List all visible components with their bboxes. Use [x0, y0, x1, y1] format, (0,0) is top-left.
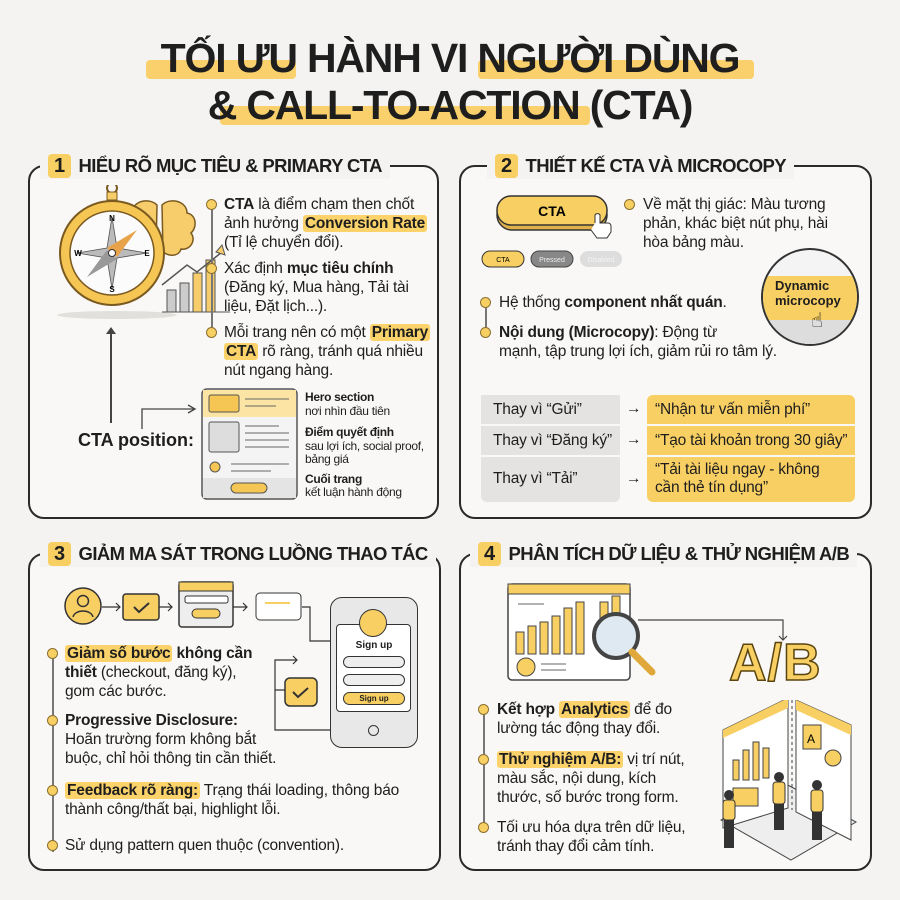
table: microcopy examples [481, 395, 855, 502]
bullets 1: Xác định mục tiêu chính [224, 260, 393, 277]
icon: dynamic microcopy: Dynamic [775, 278, 829, 293]
icon: dynamic microcopy: ☝ [811, 310, 823, 332]
bullets 1: nút ngang hàng. [224, 362, 333, 379]
bullets 3: thành công/thất bại, highlight lỗi. [65, 801, 280, 818]
position labels [305, 390, 424, 499]
icon: dynamic microcopy: microcopy [775, 293, 841, 308]
table: microcopy examples: “Tạo tài khoản trong 30 giây” [655, 432, 847, 449]
bullets 1: liệu, Đặt lịch...). [224, 298, 327, 315]
title highlights [146, 60, 754, 125]
bullets 3: gom các bước. [65, 683, 167, 700]
title: TỐI ƯU HÀNH VI NGƯỜI DÙNG [161, 35, 739, 81]
heading 2 [487, 153, 794, 179]
heading 2: THIẾT KẾ CTA VÀ MICROCOPY [526, 155, 786, 176]
bullets 3: Feedback rõ ràng: Trạng thái loading, thông báo [67, 782, 399, 799]
bullets 4: lường tác động thay đổi. [497, 720, 660, 737]
bullets 3 [47, 645, 399, 854]
table: microcopy examples: → [626, 470, 641, 487]
label: CTA position: CTA position: [78, 430, 194, 450]
bullets 1: ảnh hưởng Conversion Rate [224, 215, 425, 232]
bullets 1: CTA là điểm chạm then chốt [224, 196, 414, 213]
icon: dynamic microcopy [761, 248, 859, 346]
table: microcopy examples: → [626, 431, 641, 448]
heading 2: 2 [501, 155, 512, 177]
table: microcopy examples: cần thẻ tín dụng” [655, 479, 768, 496]
position labels: bảng giá Cuối trang [305, 452, 362, 486]
A/B label: A/B [729, 634, 822, 692]
bullets 1 [206, 196, 430, 379]
panel: 4 [459, 553, 872, 871]
icon: compass brain chart: E [144, 249, 150, 258]
bullets: component & microcopy: Hệ thống component nhất quán. [499, 294, 727, 311]
phone sign up: Sign up [356, 640, 392, 651]
icon: analytics dashboard [507, 583, 788, 681]
panel: 3 [28, 553, 441, 871]
heading 3: 3 [54, 543, 65, 565]
table: microcopy examples: Thay vì “Đăng ký” [493, 432, 612, 449]
heading 1: HIỂU RÕ MỤC TIÊU & PRIMARY CTA [79, 155, 382, 176]
table: microcopy examples: Thay vì “Gửi” [493, 401, 582, 418]
bullets 3: Sử dụng pattern quen thuộc (convention). [65, 837, 344, 854]
bullet: visual [624, 196, 828, 251]
heading 4: PHÂN TÍCH DỮ LIỆU & THỬ NGHIỆM A/B [509, 543, 849, 564]
illustration: A/B test people [720, 700, 857, 861]
panel: 2 [459, 165, 872, 519]
arrow right [141, 404, 196, 429]
heading 3: GIẢM MA SÁT TRONG LUỒNG THAO TÁC [79, 543, 428, 564]
heading 1: 1 [54, 155, 65, 177]
bullets 4: tránh thay đổi cảm tính. [497, 838, 654, 855]
arrow up [106, 327, 116, 423]
position labels: kết luận hành động [305, 485, 402, 499]
bullets 1: CTA rõ ràng, tránh quá nhiều [226, 343, 423, 360]
position labels: nơi nhìn đầu tiên Điểm quyết định [305, 404, 394, 439]
bullet: visual: hòa bảng màu. [643, 234, 744, 251]
position labels: Hero section [305, 390, 374, 404]
title: & CALL-TO-ACTION (CTA) [208, 82, 692, 128]
bullets 4: Thử nghiệm A/B: vị trí nút, [499, 751, 685, 768]
bullet: visual: phản, khác biệt nút phụ, hài [643, 215, 828, 232]
icon: compass brain chart [57, 185, 230, 319]
bullets 3: thiết (checkout, đăng ký), [65, 664, 236, 681]
icon: compass brain chart: N [109, 214, 115, 223]
phone sign up [330, 597, 418, 748]
table: microcopy examples: “Nhận tư vấn miễn phí” [655, 401, 810, 418]
CTA buttons: Disabled [587, 257, 615, 264]
bullets 3: buộc, chỉ hỏi thông tin cần thiết. [65, 750, 276, 767]
bullets 3: Giảm số bước không cần [67, 645, 252, 662]
bullets: component & microcopy: mạnh, tập trung lợi ích, giảm rủi ro tâm lý. [499, 343, 777, 360]
flow diagram [64, 581, 330, 731]
CTA buttons: Pressed [539, 257, 565, 264]
illustration: A/B test people: A [807, 732, 815, 746]
panel: 1 [28, 165, 439, 519]
bullets 4: màu sắc, nội dung, kích [497, 770, 656, 787]
CTA buttons: CTA [496, 257, 510, 264]
bullet: visual: Về mặt thị giác: Màu tương [643, 196, 825, 213]
bullets 1: (Đăng ký, Mua hàng, Tải tài [224, 279, 409, 296]
phone sign up: Sign up [359, 694, 389, 703]
bullets 4: Tối ưu hóa dựa trên dữ liệu, [497, 819, 685, 836]
page mockup [201, 388, 298, 500]
bullets 4 [478, 701, 685, 855]
bullets 4: Kết hợp Analytics để đo [497, 701, 672, 718]
table: microcopy examples: “Tải tài liệu ngay - không [655, 461, 820, 478]
bullets: component & microcopy: Nội dung (Microcopy): Động từ [499, 324, 717, 341]
CTA buttons [482, 195, 622, 268]
position labels: sau lợi ích, social proof, [305, 438, 424, 452]
bullets 4: thước, số bước trong form. [497, 789, 678, 806]
heading 4: 4 [484, 543, 495, 565]
icon: compass brain chart: S [109, 285, 115, 294]
bullets 3: Hoãn trường form không bắt [65, 731, 256, 748]
icon: compass brain chart: W [74, 249, 82, 258]
bullets: component & microcopy [480, 294, 777, 360]
table: microcopy examples: → [626, 400, 641, 417]
bullets 1: (Tỉ lệ chuyển đổi). [224, 234, 343, 251]
bullets 1: Mỗi trang nên có một Primary [224, 324, 428, 341]
table: microcopy examples: Thay vì “Tải” [493, 470, 577, 487]
title [161, 35, 739, 128]
bullets 3: Progressive Disclosure: [65, 712, 238, 729]
CTA buttons: CTA [538, 203, 566, 219]
